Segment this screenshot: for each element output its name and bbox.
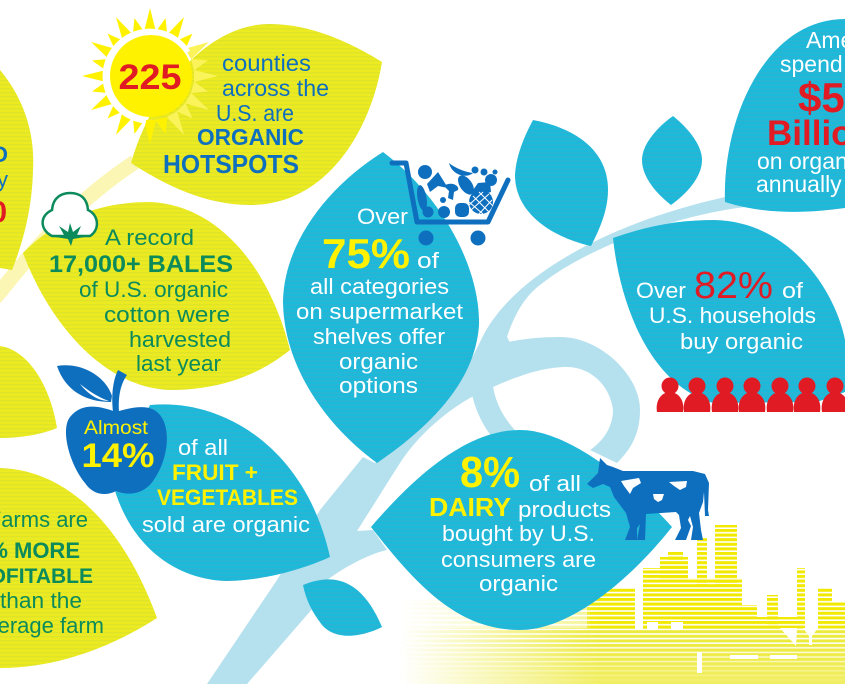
leaf: annual spending: annually: [756, 171, 842, 197]
leaf: farms more profitable: [0, 468, 157, 668]
leaf: households: Over: [636, 278, 686, 303]
leaf: households: of: [782, 278, 804, 303]
leaf: dairy: consumers are: [441, 547, 596, 572]
leaf: empty upper centre: [642, 116, 702, 205]
leaf: annual spending: [725, 19, 845, 212]
leaf: dairy: products: [518, 497, 611, 522]
leaf: organic hotspots: across the: [222, 75, 329, 101]
icon: sun with 225: 225: [118, 58, 182, 97]
leaf: fruit and vegetables: [112, 404, 330, 581]
leaf: fruit and vegetables: of all: [178, 435, 228, 460]
icon: apple with 14%: Almost: [84, 418, 149, 439]
leaf: cotton bales: harvested: [129, 327, 231, 352]
leaf: fruit and vegetables: sold are organic: [142, 512, 310, 537]
city skyline: [400, 525, 845, 684]
leaf: dairy: organic: [479, 571, 558, 596]
leaf: fruit and vegetables: VEGETABLES: [157, 485, 298, 510]
leaf: annual spending: spend: [780, 51, 843, 77]
leaf: organic hotspots: HOTSPOTS: [163, 149, 299, 179]
leaf: organic hotspots: ORGANIC: [197, 124, 304, 150]
leaf: cotton bales: 17,000+ BALES: [49, 251, 233, 278]
leaf: small yellow: [0, 346, 57, 438]
leaf: supermarket categories: shelves offer: [313, 324, 445, 349]
leaf: supermarket categories: [283, 152, 479, 463]
leaf: households: U.S. households: [649, 303, 816, 328]
leaf: left edge statistic: [0, 70, 33, 270]
leaf: supermarket categories: options: [339, 373, 418, 398]
leaf: dairy: DAIRY: [429, 492, 511, 522]
leaf: dairy: [371, 430, 672, 630]
icon: cart wheels: [418, 230, 486, 246]
icon: apple with 14%: 14%: [82, 437, 154, 475]
leaf: households: buy organic: [680, 329, 803, 354]
leaf: dairy: bought by U.S.: [442, 521, 595, 546]
icon: apple with 14%: [57, 365, 167, 494]
leaf: small blue lower: [303, 579, 382, 636]
leaf: organic hotspots: [131, 24, 382, 205]
branch: yellow stem: [0, 162, 135, 298]
icon: cow: [587, 458, 709, 540]
leaf: cotton bales: cotton were: [104, 302, 230, 327]
icon: row of people: [657, 378, 845, 412]
leaf: cotton bales: of U.S. organic: [79, 277, 228, 302]
branches: light blue tree: [207, 197, 745, 684]
icon: cotton boll: [43, 193, 97, 246]
leaf: cotton bales: [23, 202, 290, 390]
leaf: supermarket categories: of: [417, 248, 440, 273]
leaf: supermarket categories: Over: [357, 204, 408, 229]
leaf: organic hotspots: U.S. are: [216, 100, 294, 126]
leaf: supermarket categories: all categories: [310, 274, 449, 299]
leaf: organic hotspots: counties: [222, 50, 311, 76]
icon: shopping cart: [392, 163, 508, 222]
leaf: supermarket categories: on supermarket: [296, 299, 463, 324]
leaf: households: 82%: [694, 265, 773, 307]
leaf: supermarket categories: 75%: [322, 230, 410, 277]
icon: sun with 225: [82, 8, 218, 144]
leaf: cotton bales: A record: [105, 225, 194, 250]
leaf: cotton bales: last year: [136, 351, 221, 376]
leaf: farms more profitable: than the: [0, 588, 82, 613]
leaf: households: [613, 220, 845, 403]
leaf: fruit and vegetables: FRUIT +: [172, 460, 258, 485]
leaf: empty upper left: [515, 120, 608, 246]
leaf: supermarket categories: organic: [339, 349, 418, 374]
leaf: dairy: 8%: [460, 448, 520, 497]
leaf: dairy: of all: [529, 471, 581, 496]
